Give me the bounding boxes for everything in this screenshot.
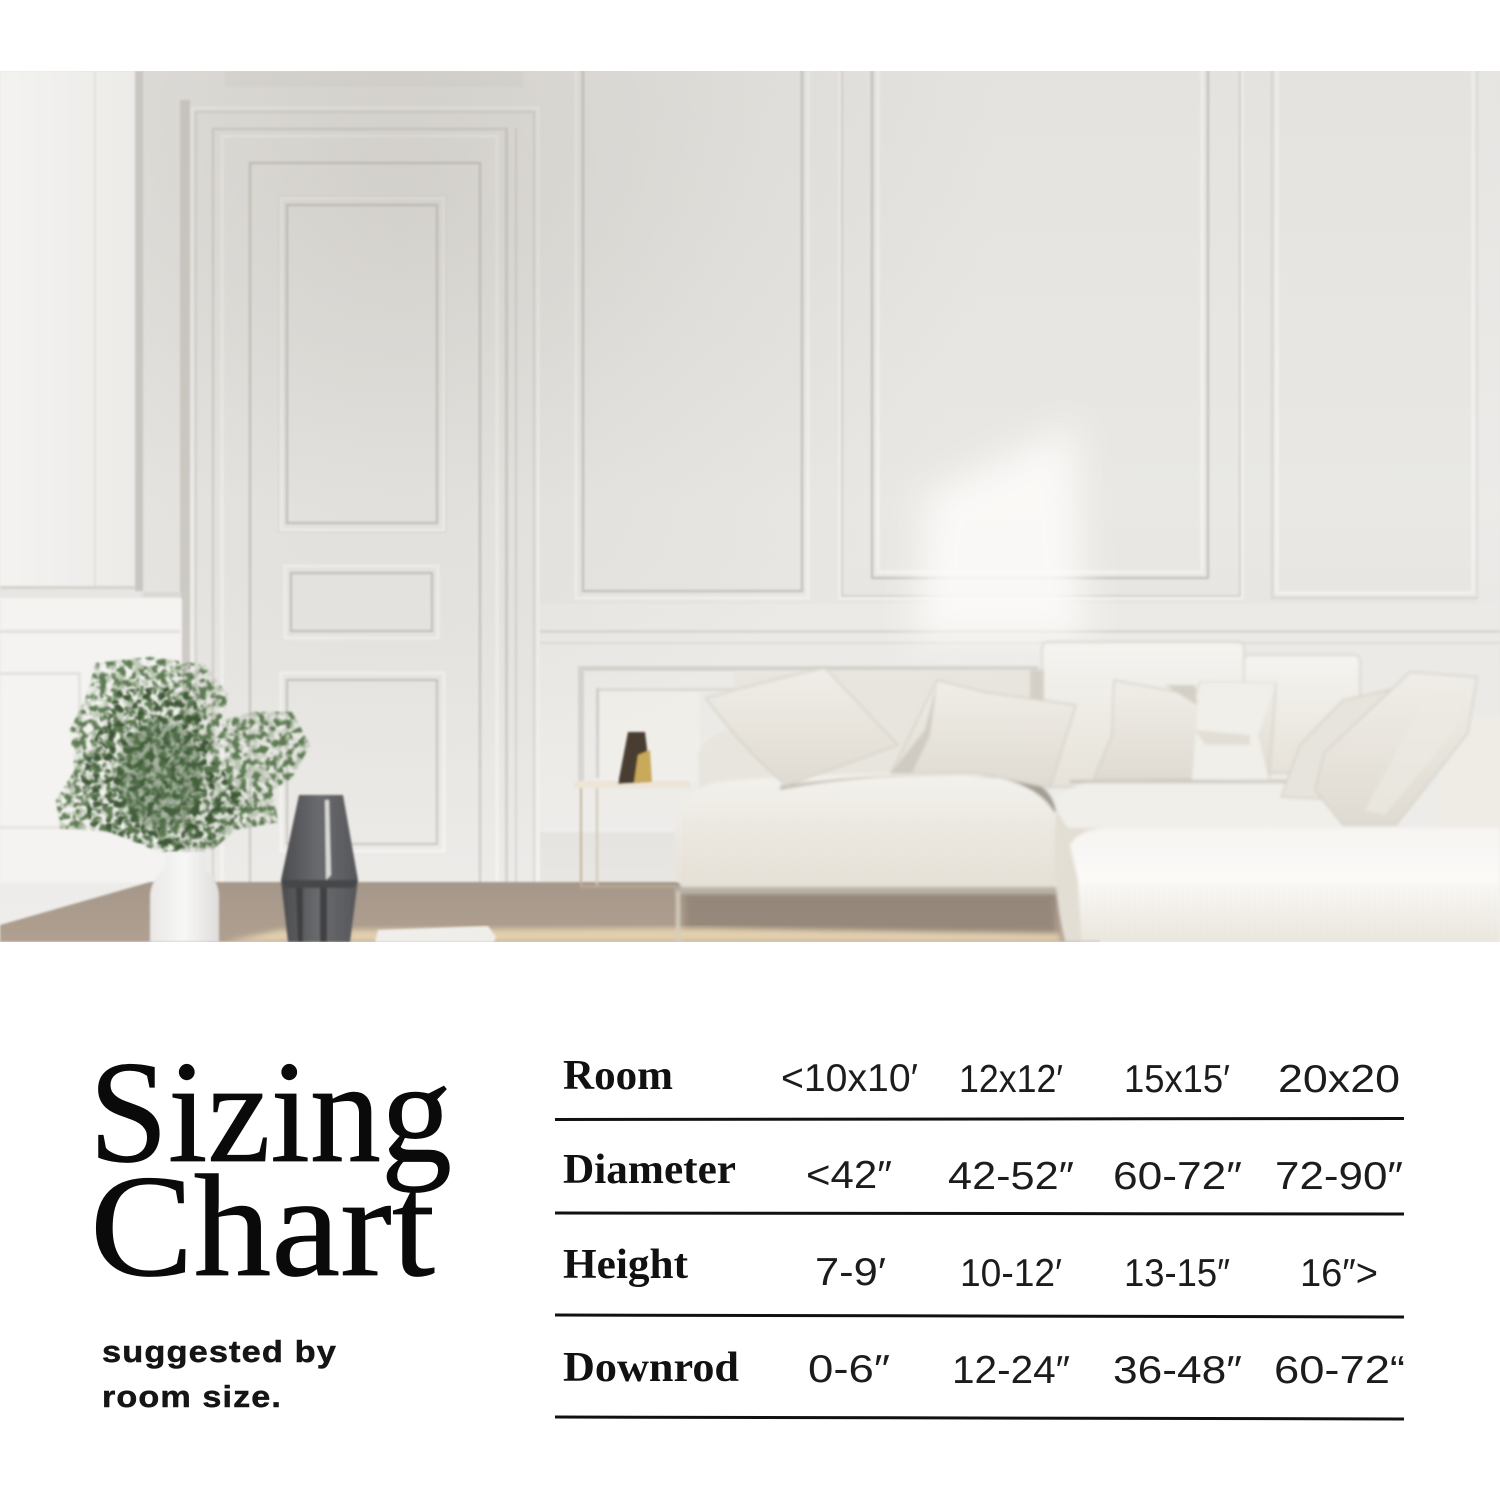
sofa rail and leg: [675, 887, 1056, 894]
vertical light falloff: [250, 71, 1474, 880]
pillow centre: [891, 680, 1076, 788]
sizing table: [555, 1053, 1405, 1419]
seat shadow beneath pillows: [778, 774, 994, 791]
left seat: [675, 774, 1056, 888]
row: Room: <10x10′: [781, 1057, 918, 1100]
wall mouldings and door: [180, 60, 1500, 908]
row: Room: Room: [563, 1053, 673, 1099]
photo: white living room: [0, 60, 1500, 942]
pillow far right: [1315, 672, 1477, 825]
foliage: [56, 657, 310, 852]
row: Downrod: 12-24″: [952, 1349, 1070, 1392]
row: Diameter: 72-90″: [1275, 1155, 1403, 1198]
title line one: Sizing: [89, 1031, 452, 1193]
row: Height: [563, 1242, 1378, 1295]
sofa: [675, 642, 1500, 942]
floor: [0, 882, 1100, 942]
row: Diameter: Diameter: [563, 1147, 736, 1193]
pillow pair right: [1094, 680, 1276, 780]
wall: [0, 71, 1500, 942]
right arm: [1440, 717, 1500, 829]
row: Diameter: 42-52″: [948, 1155, 1074, 1198]
row: Downrod: 36-48″: [1113, 1349, 1242, 1392]
floor shadow under sofa: [685, 893, 1055, 933]
chaise: [1054, 812, 1094, 942]
row: Downrod: 0-6″: [808, 1348, 890, 1391]
side table: [574, 732, 690, 888]
row: Room: 15x15′: [1124, 1058, 1230, 1101]
row: Downrod: Downrod: [563, 1345, 739, 1391]
subtitle: suggested by: [102, 1334, 337, 1369]
door frame: [180, 71, 538, 908]
row: Height: 13-15″: [1124, 1252, 1230, 1295]
plant: [56, 657, 310, 852]
wall shading: [144, 71, 746, 530]
table ornament: [618, 732, 652, 784]
row: Diameter: [563, 1147, 1403, 1198]
row: Room: [563, 1053, 1400, 1101]
row: Height: 7-9′: [815, 1251, 886, 1294]
foliage core shade: [118, 720, 202, 830]
door panels: [279, 196, 446, 851]
subtitle: room size.: [102, 1379, 282, 1414]
rug: [225, 928, 1060, 942]
grey geometric vase: [281, 795, 358, 942]
pillow left: [706, 668, 898, 786]
back cushions: [1243, 655, 1360, 773]
row: Height: Height: [563, 1242, 688, 1288]
row: Height: 10-12′: [960, 1252, 1062, 1295]
pale foliage: [56, 657, 310, 852]
row: Diameter: 60-72″: [1113, 1155, 1242, 1198]
subtitle: [102, 1334, 337, 1414]
title: Sizing Chart: [89, 1031, 452, 1307]
white vase: [150, 852, 219, 942]
lower wall and rail: [540, 630, 1500, 782]
row: Height: 16″>: [1300, 1252, 1378, 1295]
row: Room: 20x20: [1278, 1058, 1400, 1101]
left wall panel: [0, 71, 182, 883]
pillow slim: [1281, 690, 1389, 800]
row: Diameter: <42″: [806, 1154, 892, 1197]
dense foliage leaves: [80, 685, 250, 850]
row: Room: 12x12′: [959, 1058, 1063, 1101]
wall panels: [576, 60, 1500, 631]
sunlight patch on wall: [915, 425, 1085, 640]
books: [375, 926, 496, 942]
row: Downrod: [563, 1345, 1405, 1392]
row: Downrod: 60-72“: [1274, 1349, 1405, 1392]
title line two: Chart: [90, 1145, 435, 1307]
right seat: [1074, 782, 1245, 790]
